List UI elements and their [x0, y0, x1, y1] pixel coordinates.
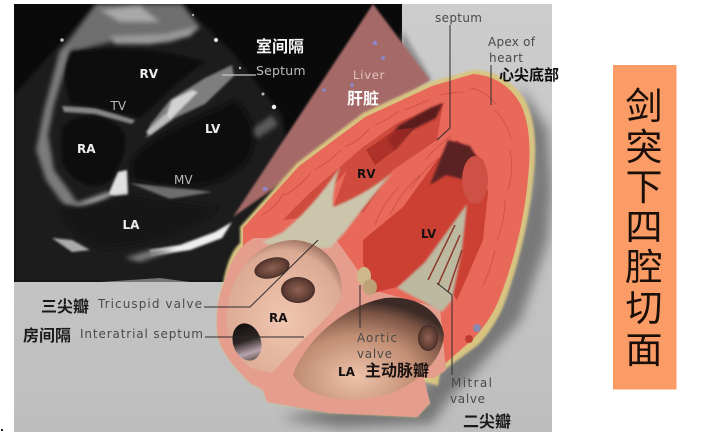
LV cavity [363, 140, 488, 300]
label: RV echo: RV [140, 67, 159, 81]
title vertical text: 剑 [626, 86, 662, 127]
title vertical text: 腔 [626, 247, 662, 288]
aortic valve [357, 267, 377, 295]
panel: title box [613, 65, 676, 390]
label: aortic valve: valve [357, 347, 392, 361]
title vertical text [626, 86, 662, 371]
title vertical text: 突 [626, 127, 662, 168]
myocardium [243, 74, 530, 368]
AV cross [108, 170, 128, 196]
label: tricuspid Chinese: 三尖瓣 [41, 298, 89, 316]
echo labels [77, 67, 221, 232]
label: mitral Chinese: 二尖瓣 [463, 413, 511, 431]
LA opening [418, 325, 438, 351]
label: liver Chinese: 肝脏 [347, 89, 379, 108]
label: aortic valve [357, 331, 397, 361]
illustration: heart cross-section [217, 70, 535, 417]
illustration: liver [233, 4, 430, 217]
LA chamber [293, 298, 444, 400]
left wall [36, 44, 80, 208]
TV leaflet [62, 106, 135, 124]
title vertical text: 面 [626, 330, 662, 371]
chordae mitral [397, 204, 467, 312]
title vertical text: 四 [626, 207, 662, 248]
label: RA heart: RA [269, 311, 288, 325]
stray dot [1, 429, 3, 431]
label: aortic valve: Aortic [357, 331, 397, 345]
label: tricuspid English: Tricuspid valve [97, 297, 202, 311]
RV cavity [283, 103, 443, 220]
top mask [402, 0, 552, 4]
label: apex of heart: Apex of [488, 35, 536, 49]
ultrasound sector [14, 4, 290, 282]
heart outer wall [217, 70, 535, 417]
label: liver English: Liver [353, 68, 385, 82]
label: mitral valve [450, 376, 492, 406]
septum [146, 65, 234, 138]
label: mitral valve: valve [450, 392, 485, 406]
label: LV heart: LV [421, 227, 437, 241]
title vertical text: 下 [626, 167, 662, 208]
label: apex of heart: heart [489, 51, 523, 65]
posterior wall [150, 222, 232, 256]
panel: grey background [14, 4, 552, 432]
RA chamber [227, 240, 342, 373]
label: LV echo: LV [205, 122, 221, 136]
top tissue [62, 4, 200, 50]
chambers [65, 49, 205, 118]
RA openings [252, 254, 292, 282]
septum leader line [222, 74, 256, 76]
label: interatrial Chinese: 房间隔 [23, 326, 71, 345]
label: LA heart: LA [338, 365, 356, 379]
label: RA echo: RA [77, 142, 96, 156]
chordae tricuspid [262, 167, 393, 250]
label: MV echo: MV [174, 173, 193, 187]
leader lines [204, 25, 491, 375]
label: septum English: Septum [256, 63, 306, 78]
lower pink base [217, 238, 446, 417]
title vertical text: 切 [626, 288, 662, 329]
label: septum Chinese: 室间隔 [256, 37, 304, 56]
label: septum top: septum [435, 11, 482, 25]
label: aortic Chinese: 主动脉瓣 [365, 361, 429, 380]
panel: echocardiogram [14, 4, 402, 282]
label: TV echo: TV [110, 99, 127, 113]
heart shadow [280, 30, 552, 428]
label: mitral valve: Mitral [451, 376, 492, 390]
coronary vessels [465, 324, 481, 343]
muscle texture [262, 88, 512, 286]
label: apex of heart [488, 35, 536, 65]
label: RV heart: RV [357, 167, 376, 181]
label: LA echo: LA [122, 218, 140, 232]
label: interatrial English: Interatrial septum [80, 327, 203, 341]
label: apex Chinese: 心尖底部 [499, 66, 559, 84]
